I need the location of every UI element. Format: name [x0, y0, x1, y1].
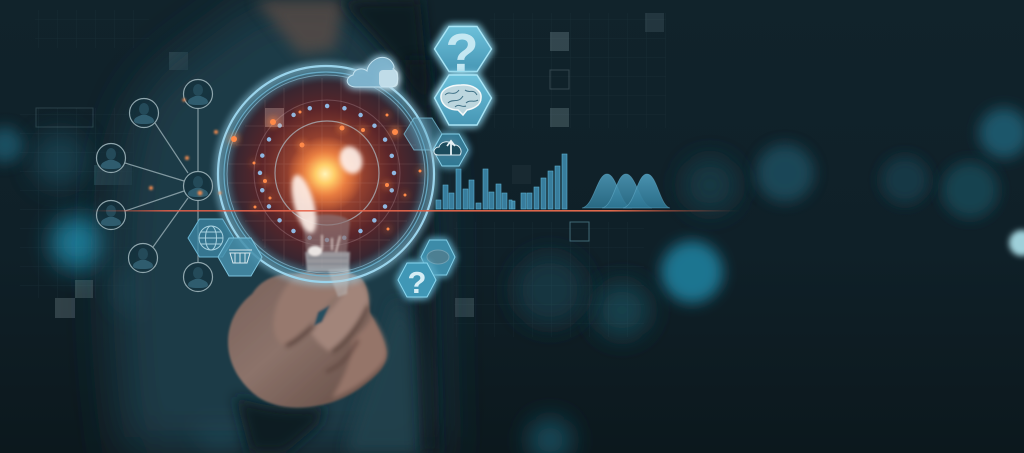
hexagon: question mark large — [434, 23, 492, 83]
orange sparks — [231, 110, 422, 230]
glass highlights — [287, 172, 321, 236]
blurred bokeh lights — [0, 108, 1024, 453]
hexagon: globe — [188, 219, 234, 257]
hexagon: question mark small: ? — [408, 265, 426, 300]
inner ring — [275, 121, 379, 225]
grid panel: left — [20, 10, 226, 336]
grid panel: right — [454, 13, 666, 337]
sleeve — [235, 395, 325, 453]
filament glow — [287, 136, 363, 212]
hexagon: brain — [434, 75, 492, 125]
hexagon: question mark large: ? — [446, 23, 478, 83]
bar chart — [436, 154, 567, 209]
horizontal red line — [90, 210, 740, 212]
outer rings — [218, 66, 434, 282]
person node: left — [96, 144, 126, 172]
hand holding bulb — [228, 267, 387, 408]
person node: top — [184, 80, 212, 108]
network connections — [125, 109, 198, 262]
person silhouette — [113, 0, 440, 453]
dot ring — [260, 106, 394, 240]
small sparks near network — [149, 98, 222, 195]
grid over disc — [228, 78, 424, 268]
person node: bottom left — [128, 244, 158, 272]
person node: bottom — [184, 262, 212, 292]
cloud icon on ring — [347, 58, 398, 87]
person node: hub — [184, 172, 212, 200]
hexagon: cart — [218, 238, 262, 276]
disc — [226, 74, 426, 274]
person node: lower left — [96, 200, 126, 230]
hexagon: faint over ring — [404, 118, 442, 150]
highlighted squares — [265, 108, 284, 127]
hexagon: question mark small — [398, 263, 436, 300]
glowing circle with bulb — [218, 66, 434, 297]
distribution curves — [582, 174, 670, 208]
bulb base — [303, 214, 350, 297]
hexagon: faint brain lower — [421, 240, 455, 275]
person node: upper left — [130, 98, 158, 128]
hexagon: cloud upload — [433, 134, 468, 166]
